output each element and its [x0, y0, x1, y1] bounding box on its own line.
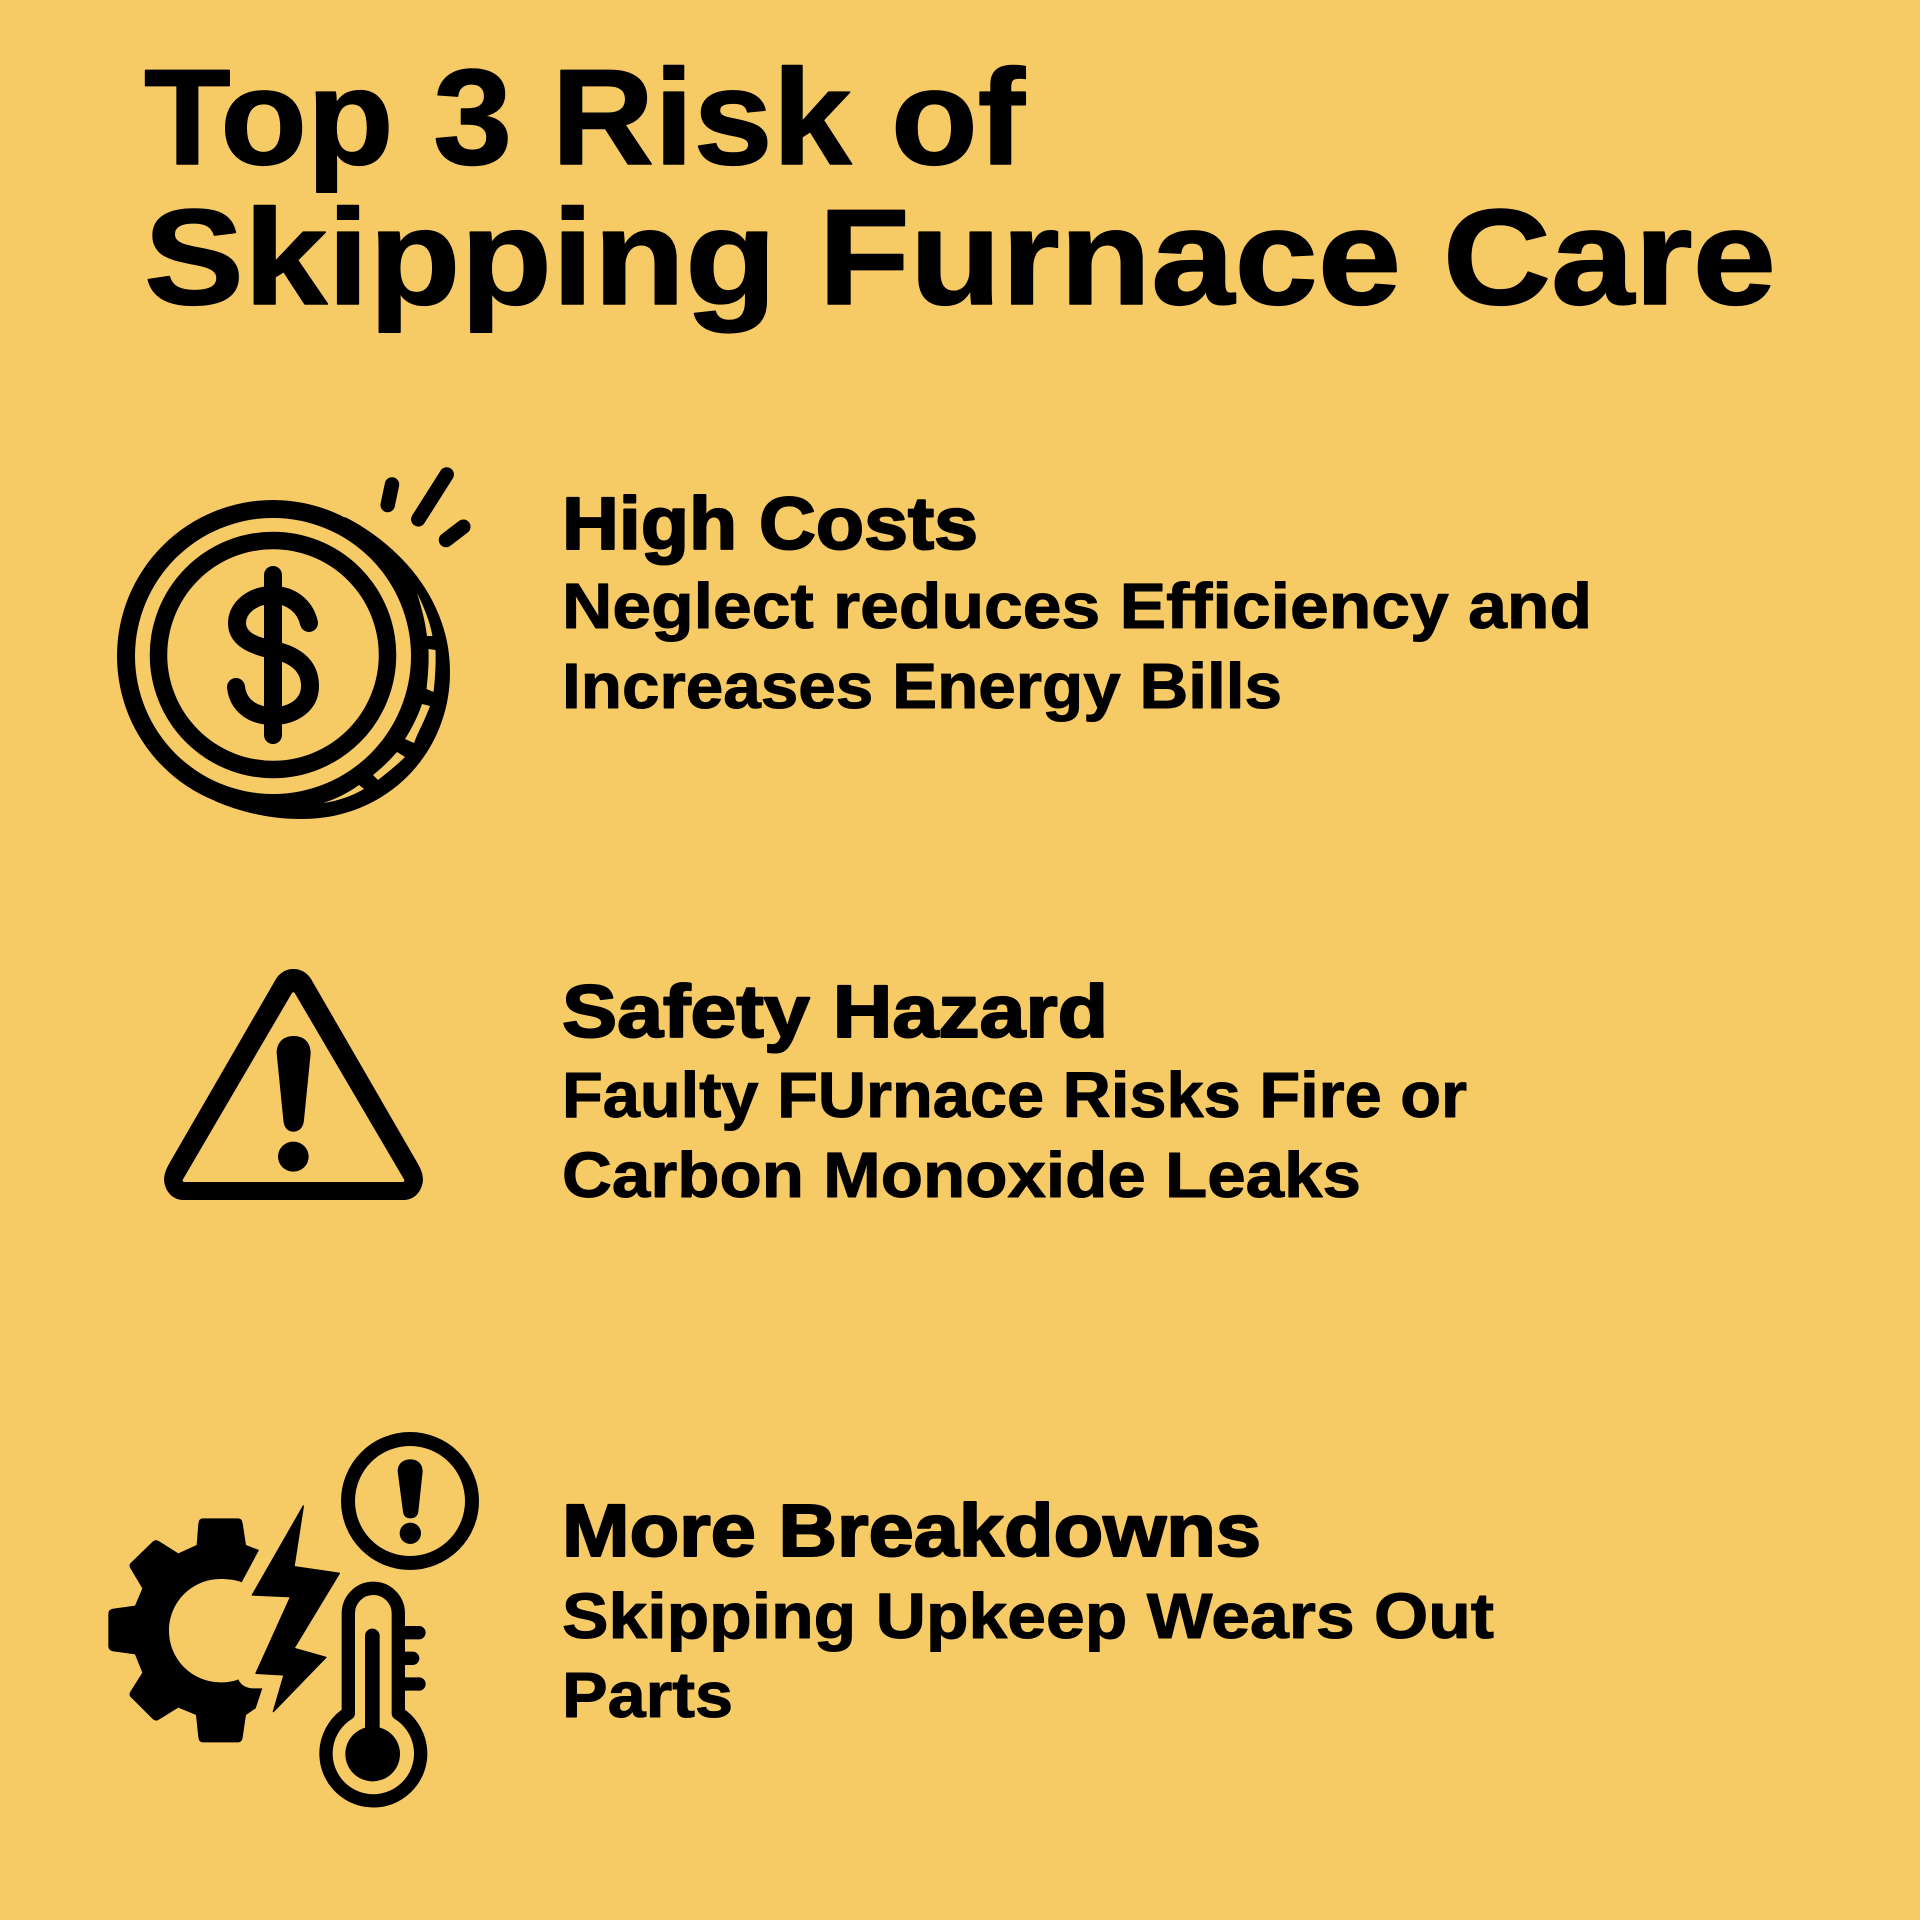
description: safety hazard: Faulty FUrnace Risks Fire or — [562, 1059, 1467, 1131]
panel: more breakdowns — [108, 1439, 1494, 1801]
description: safety hazard — [562, 1059, 1467, 1211]
panel: high costs — [117, 474, 1592, 819]
title — [144, 41, 1776, 333]
description: more breakdowns: Parts — [562, 1659, 733, 1731]
heading: high costs: High Costs — [562, 482, 978, 565]
title: Skipping Furnace Care — [144, 181, 1776, 333]
panel: safety hazard — [164, 969, 1467, 1211]
icon: coin with dollar sign — [117, 474, 463, 819]
icon: gear, lightning, alert and thermometer — [108, 1439, 472, 1801]
title: Top 3 Risk of — [144, 41, 1026, 193]
description: high costs: Increases Energy Bills — [562, 650, 1282, 722]
heading: safety hazard: Safety Hazard — [562, 970, 1108, 1053]
description: high costs — [562, 570, 1592, 722]
icon: warning triangle — [164, 969, 423, 1200]
description: high costs: Neglect reduces Efficiency and — [562, 570, 1592, 642]
heading: more breakdowns: More Breakdowns — [562, 1489, 1261, 1572]
description: more breakdowns — [562, 1580, 1494, 1731]
description: more breakdowns: Skipping Upkeep Wears Out — [562, 1580, 1494, 1652]
description: safety hazard: Carbon Monoxide Leaks — [562, 1139, 1361, 1211]
